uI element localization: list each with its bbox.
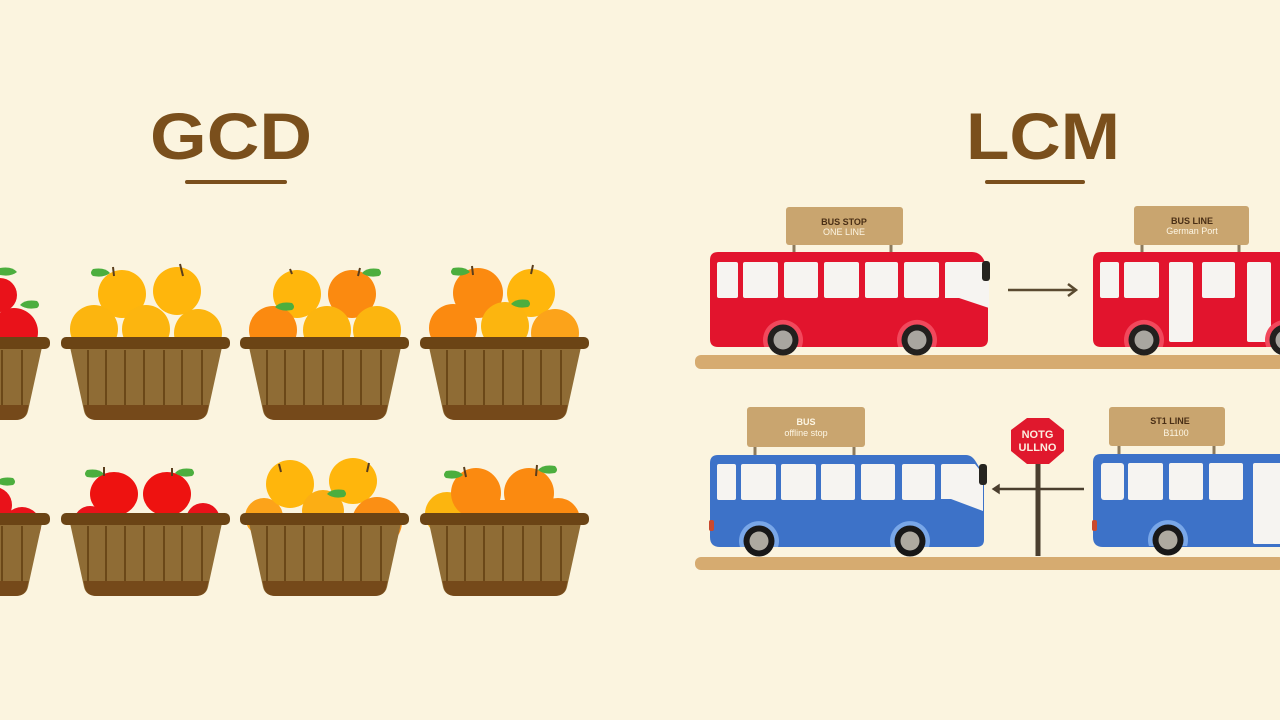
sign: German Port [1166, 226, 1218, 236]
sign: BUS LINE [1171, 216, 1213, 226]
road: top [695, 355, 1280, 369]
basket row 1, basket 1: apples [0, 268, 50, 420]
basket row 1, basket 4: oranges [420, 265, 589, 420]
heading: GCD: GCD [150, 99, 312, 173]
sign [1109, 407, 1225, 454]
panel: GCD [0, 99, 589, 596]
sign: BUS STOP [821, 217, 867, 227]
arrow: left [993, 485, 1084, 493]
sign: offline stop [784, 428, 828, 438]
basket row 2, basket 3: oranges [240, 458, 409, 596]
sign: ST1 LINE [1150, 416, 1190, 426]
sign [1134, 206, 1249, 252]
stop sign: NOTG [1022, 429, 1053, 441]
bus: red 1 [710, 207, 990, 356]
basket row 2, basket 2: apples [61, 467, 230, 596]
bus: red 2 [1093, 206, 1280, 356]
sign [747, 407, 865, 455]
heading: LCM: LCM [966, 99, 1120, 173]
stop sign: ULLNO [1019, 442, 1057, 454]
arrow: right [1008, 284, 1076, 296]
basket row 2, basket 4: oranges [420, 465, 589, 596]
panel: LCM [695, 99, 1280, 570]
sign: B1100 [1163, 428, 1189, 438]
basket row 1, basket 3: oranges [240, 268, 409, 420]
stop sign [1011, 418, 1064, 556]
heading underline: GCD [185, 180, 287, 184]
basket row 1, basket 2: oranges [61, 264, 230, 420]
basket row 2, basket 1: apples [0, 478, 50, 596]
sign: ONE LINE [823, 227, 865, 237]
sign: BUS [796, 417, 816, 427]
bus: blue 2 [1092, 407, 1280, 556]
road: bottom [695, 557, 1280, 570]
sign [786, 207, 903, 252]
heading underline: LCM [985, 180, 1085, 184]
bus: blue 1 [709, 407, 987, 556]
